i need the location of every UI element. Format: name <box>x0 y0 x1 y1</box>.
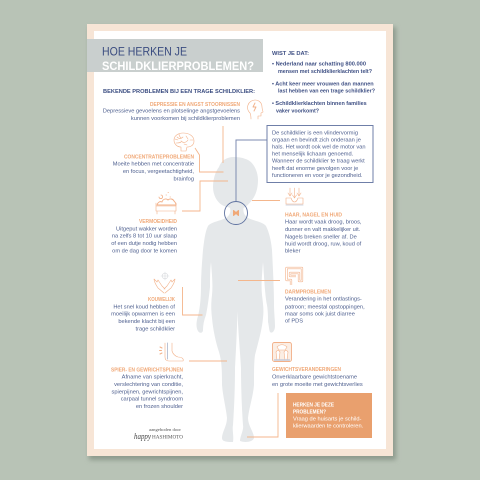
panel: cold: moeilijk opwarmen is een <box>111 312 175 318</box>
info box: thyroid: het menselijk lichaam genoemd. <box>272 151 354 157</box>
did you know block: WIST JE DAT: <box>272 51 309 57</box>
callout: klierwaarden te controleren. <box>293 424 364 430</box>
info box: thyroid: hals. Het wordt ook wel de motor van <box>272 144 366 150</box>
panel: hair nails skin: dunner en valt makkelijker uit. <box>285 227 361 233</box>
panel: muscle pain <box>111 367 183 410</box>
panel: fatigue: om de dag door te komen <box>112 248 177 254</box>
callout: Vraag de huisarts je schild- <box>293 416 361 422</box>
body silhouette <box>196 157 275 442</box>
panel: concentration: CONCENTRATIEPROBLEMEN <box>124 154 194 160</box>
logo: happy <box>134 432 151 441</box>
info box: thyroid: De schildklier is een vlindervormig <box>272 130 358 136</box>
panel: fatigue: of een dutje nodig hebben <box>111 241 177 247</box>
icon: cold hands <box>154 272 175 293</box>
icon: scale <box>272 342 292 362</box>
did you know block: mensen met schildklierklachten telt? <box>278 69 372 75</box>
panel: depression: DEPRESSIE EN ANGST STOORNISSEN <box>150 102 240 108</box>
panel: fatigue <box>111 219 177 254</box>
info box: thyroid: heeft dat enorme gevolgen voor je <box>272 166 358 172</box>
panel: concentration: brainfog <box>173 176 194 182</box>
heading: known problems: BEKENDE PROBLEMEN BIJ EEN TRAGE SCHILDKLIER: <box>103 89 255 95</box>
panel: weight: en grote moeite met gewichtsverlies <box>272 382 363 388</box>
panel: bowel: maar soms ook juist diarree <box>285 312 355 318</box>
panel: bowel <box>285 289 365 325</box>
panel: hair nails skin: Nagels breken sneller af. De <box>285 234 357 240</box>
panel: bowel: Verandering in het ontlastings- <box>285 297 362 303</box>
panel: bowel: DARMPROBLEMEN <box>285 289 331 295</box>
icon: thyroid circle <box>224 202 248 224</box>
info box: thyroid: functioneren en voor je gezondheid. <box>272 173 363 179</box>
panel: weight: GEWICHTSVERANDERINGEN <box>272 367 341 373</box>
panel: muscle pain: spierpijnen, gewrichtspijnen, <box>112 389 183 395</box>
panel: cold: KOUWELIJK <box>148 297 175 303</box>
panel: depression: kunnen voorkomen bij schildklierproblemen <box>131 116 240 122</box>
poster sheet <box>94 31 386 449</box>
panel: muscle pain: carpaal tunnel syndroom <box>121 397 183 403</box>
info box: thyroid: orgaan en bevindt zich onderaan je <box>272 137 361 143</box>
panel: bowel: of PDS <box>285 319 303 325</box>
panel: hair nails skin: Haar wordt vaak droog, broos, <box>285 220 362 226</box>
panel: hair nails skin: bleker <box>285 249 301 255</box>
panel: fatigue: Uitgeput wakker worden <box>116 226 177 232</box>
logo: aangeboden door <box>149 427 181 432</box>
panel: weight <box>272 367 363 388</box>
panel: fatigue: VERMOEIDHEID <box>139 219 177 225</box>
connector lines <box>182 126 280 437</box>
callout <box>286 393 372 438</box>
icon: bed <box>156 192 176 214</box>
did you know block: • Schildklierklachten binnen families <box>272 101 367 107</box>
panel: cold: bekende klacht bij een <box>118 319 175 325</box>
panel: concentration <box>113 154 194 182</box>
title <box>87 39 263 73</box>
icon: foot <box>160 343 183 361</box>
panel: muscle pain: en frozen shoulder <box>136 404 183 410</box>
icon: head <box>248 100 263 119</box>
did you know block: vaker voorkomt? <box>276 109 319 115</box>
panel: weight: Onverklaarbare gewichtstoename <box>272 375 357 381</box>
poster frame <box>87 24 393 456</box>
callout: PROBLEMEN? <box>293 409 327 415</box>
title: HOE HERKEN JE <box>102 44 187 58</box>
panel: muscle pain: verslechtering van conditie, <box>114 382 183 388</box>
panel: concentration: en focus, vergeetachtigheid, <box>123 169 194 175</box>
panel: muscle pain: SPIER- EN GEWRICHTSPIJNEN <box>111 367 183 373</box>
panel: muscle pain: Afname van spierkracht, <box>122 375 183 381</box>
panel: depression: Depressieve gevoelens en plotselinge angstgevoelens <box>103 108 240 114</box>
panel: fatigue: na zelfs 8 tot 10 uur slaap <box>112 234 177 240</box>
panel: hair nails skin: huid wordt droog, ruw, koud of <box>285 242 362 248</box>
did you know block <box>272 51 375 115</box>
icon: brain <box>174 133 194 151</box>
info box: thyroid <box>236 126 373 202</box>
title: SCHILDKLIERPROBLEMEN? <box>102 61 254 73</box>
panel: cold: Het snel koud hebben of <box>113 304 175 310</box>
panel: depression <box>103 102 240 122</box>
icon: intestine <box>286 268 302 285</box>
logo <box>134 427 183 441</box>
panel: hair nails skin <box>285 212 362 255</box>
panel: cold <box>111 297 175 332</box>
panel: cold: trage schildklier <box>135 326 175 332</box>
icon: hair follicle <box>286 188 303 205</box>
poster shadow <box>89 27 396 460</box>
panel: bowel: patroon; meestal opstoppingen, <box>285 304 365 310</box>
callout: HERKEN JE DEZE <box>293 402 334 408</box>
info box: thyroid: Wanneer de schildklier te traag werkt <box>272 159 365 165</box>
logo: HASHIMOTO <box>152 434 183 440</box>
panel: concentration: Moeite hebben met concentratie <box>113 162 194 168</box>
did you know block: • Nederland naar schatting 800.000 <box>272 61 366 67</box>
did you know block: last hebben van een trage schildklier? <box>278 88 375 94</box>
did you know block: • Acht keer meer vrouwen dan mannen <box>272 81 374 87</box>
panel: hair nails skin: HAAR, NAGEL EN HUID <box>285 212 342 218</box>
